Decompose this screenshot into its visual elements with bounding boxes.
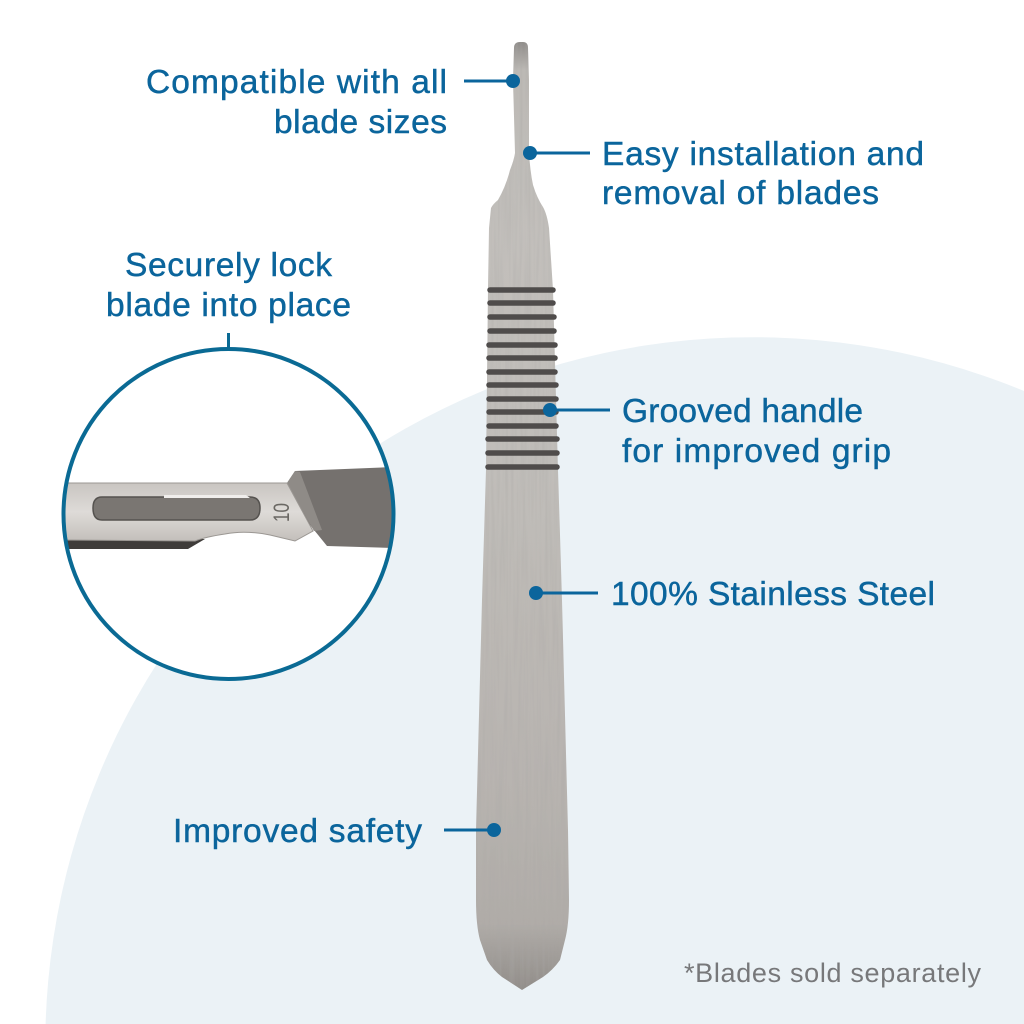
scalpel handle [476,42,569,990]
callout: blade compatibility [146,64,520,141]
inset connector [227,333,230,348]
callout: grooved handle: for improved grip [622,433,891,470]
heading: secure lock [106,247,351,324]
background circle [46,337,1024,1024]
heading: secure lock: blade into place [106,287,351,324]
footnote: *Blades sold separately [684,958,982,988]
inset ring [64,349,394,679]
callout: blade compatibility: blade sizes [274,104,447,141]
callout: easy installation: Easy installation and [602,136,924,173]
grooves [488,290,557,467]
callout: improved safety: Improved safety [173,813,422,850]
blade and handle close-up [60,467,395,549]
callout: blade compatibility: Compatible with all [146,64,447,101]
inset white disc [64,349,394,679]
callout: stainless steel: 100% Stainless Steel [611,576,935,613]
callout: easy installation [523,136,924,212]
callout: grooved handle: Grooved handle [622,393,863,430]
heading: secure lock: Securely lock [125,247,332,284]
handle body [476,42,569,990]
blade number: 10 [269,503,294,522]
callout: grooved handle [543,393,891,470]
callout: easy installation: removal of blades [602,175,879,212]
inset: blade lock detail [60,333,395,679]
